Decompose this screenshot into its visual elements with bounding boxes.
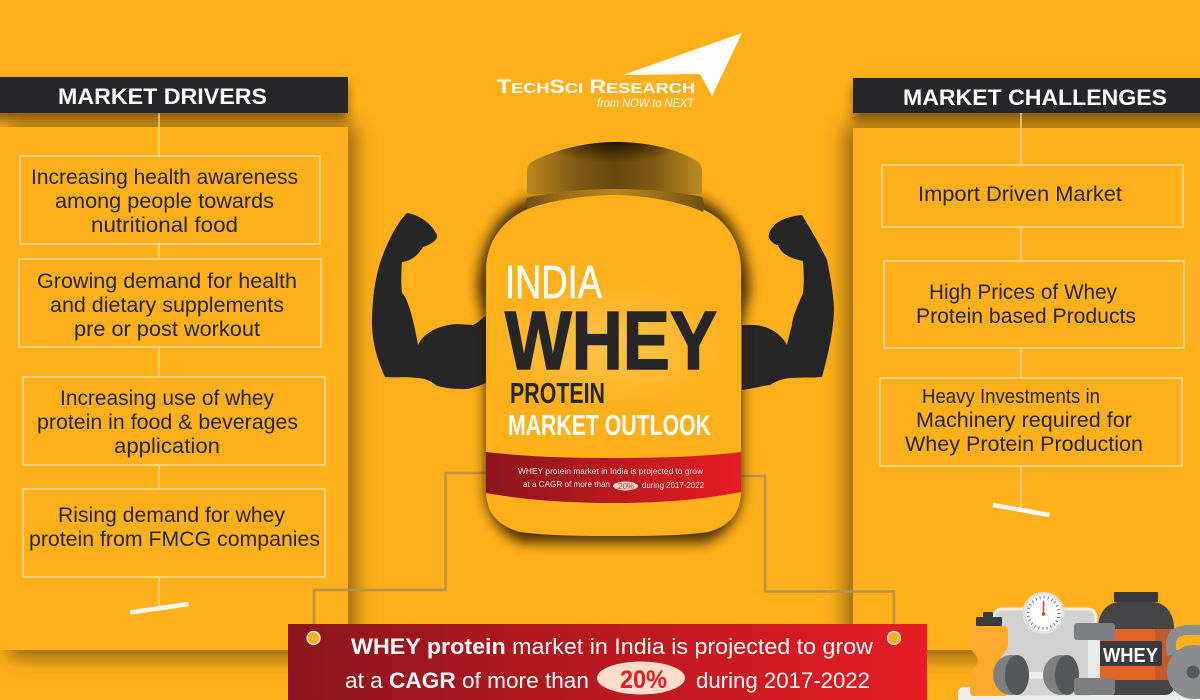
- panel: market drivers: [0, 77, 348, 650]
- challenge 2: [884, 261, 1184, 348]
- challenge 3: [880, 378, 1182, 466]
- jar title: India: INDIA: [505, 256, 602, 308]
- jar band text: [518, 466, 704, 491]
- jar red band: [486, 452, 741, 503]
- jar lid ring: [526, 189, 704, 212]
- whey tub: [1098, 592, 1174, 695]
- scale gauge: [1024, 594, 1063, 632]
- logo name: TECH SCI R ESEARCH: [497, 77, 695, 98]
- banner line 2 end: during 2017-2022: [696, 668, 870, 693]
- drivers tick: [130, 604, 188, 612]
- challenges connector: [1020, 113, 1022, 509]
- driver 3: [23, 377, 325, 465]
- logo tagline: from NOW to NEXT: [597, 98, 695, 110]
- challenges header bar: [853, 78, 1200, 113]
- driver 2: and dietary supplements: [50, 294, 284, 317]
- driver 4: protein from FMCG companies: [29, 528, 320, 551]
- logo arrow: [623, 33, 742, 96]
- whey tub: WHEY: [1103, 645, 1159, 667]
- water bottle: [970, 612, 1008, 696]
- challenge 2: Protein based Products: [916, 305, 1136, 328]
- protein jar: [477, 142, 750, 543]
- logo: TechSci Research: [497, 33, 742, 110]
- jar shadow: [477, 198, 750, 543]
- driver 3: protein in food & beverages: [37, 411, 298, 434]
- banner line 1: WHEY protein market in India is projected to grow: [351, 634, 873, 659]
- challenge 3: Heavy Investments in: [922, 386, 1100, 408]
- challenges header shadow: [853, 85, 1200, 121]
- challenge 3: Machinery required for: [916, 409, 1132, 432]
- driver 2: pre or post workout: [74, 318, 260, 341]
- jar title: Protein: PROTEIN: [510, 378, 605, 410]
- challenges tick: [993, 505, 1050, 515]
- connector dot left: [307, 632, 320, 644]
- drivers heading: MARKET DRIVERS: [58, 84, 267, 109]
- challenge 3: Whey Protein Production: [905, 433, 1143, 456]
- connector dot right: [888, 632, 900, 644]
- icon: fitness equipment: [958, 592, 1200, 700]
- icon: left flexed arm: [372, 213, 486, 389]
- driver 4: [23, 489, 325, 577]
- challenges heading: MARKET CHALLENGES: [903, 85, 1167, 110]
- challenge 1: Import Driven Market: [918, 183, 1122, 206]
- challenges body: [853, 128, 1200, 650]
- label glow: [487, 280, 737, 410]
- challenge 2: High Prices of Whey: [929, 281, 1117, 304]
- banner percent pill: 20%: [620, 666, 667, 694]
- driver 3: application: [114, 435, 220, 458]
- banner: CAGR callout: [288, 624, 927, 700]
- drivers header shadow: [0, 84, 348, 120]
- kettlebell: [1167, 630, 1200, 699]
- jar band text: WHEY protein market in India is projected to grow: [518, 466, 704, 476]
- jar band text: at a CAGR of more than: [523, 479, 610, 489]
- driver 1: [20, 156, 320, 244]
- driver 4: Rising demand for whey: [58, 504, 286, 527]
- jar band text: during 2017-2022: [642, 480, 704, 490]
- connector lines: [314, 473, 894, 632]
- banner background: [288, 624, 927, 700]
- barbell: [993, 655, 1079, 695]
- driver 2: Growing demand for health: [37, 270, 297, 293]
- jar title: Market Outlook: MARKET OUTLOOK: [508, 410, 711, 442]
- floor: [958, 687, 1200, 700]
- banner percent pill: [597, 662, 685, 694]
- jar title: Whey: WHEY: [505, 294, 717, 387]
- driver 1: nutritional food: [91, 214, 238, 237]
- icon: right flexed arm: [742, 215, 834, 390]
- driver 1: among people towards: [55, 190, 274, 213]
- drivers connector: [158, 113, 160, 607]
- jar band text: 20%: [618, 481, 634, 491]
- challenge 1: [882, 165, 1183, 227]
- panel: market challenges: [853, 78, 1200, 650]
- driver 1: Increasing health awareness: [31, 166, 298, 189]
- scale plate: [994, 609, 1096, 697]
- drivers header bar: [0, 77, 348, 113]
- banner line 2: at a CAGR of more than: [345, 668, 589, 693]
- dumbbell upright: [1074, 623, 1115, 695]
- driver 3: Increasing use of whey: [60, 387, 274, 410]
- jar lid: [527, 142, 702, 194]
- drivers body: [0, 127, 348, 650]
- jar body: [486, 195, 741, 536]
- driver 2: [19, 259, 321, 347]
- panel shadows: [8, 125, 1200, 658]
